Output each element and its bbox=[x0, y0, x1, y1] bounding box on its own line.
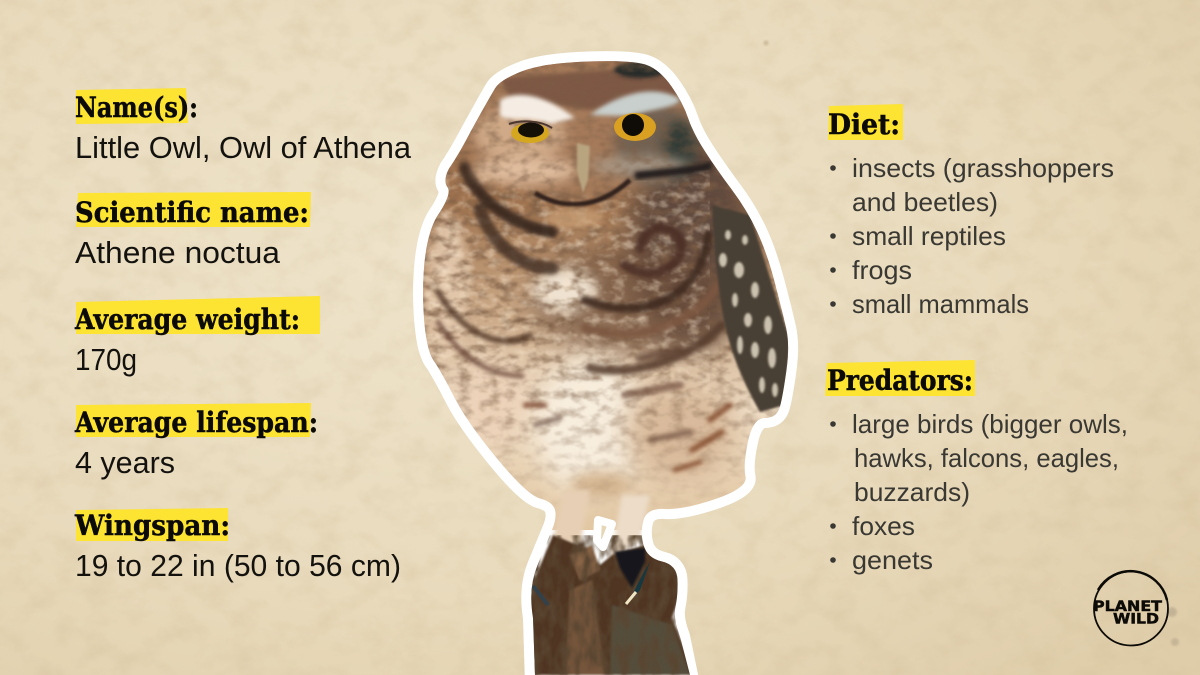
logo: Planet Wild: WILD bbox=[1113, 612, 1159, 628]
fact: scientific name: Scientific name: bbox=[75, 196, 309, 229]
fact: scientific name: Athene noctua bbox=[75, 235, 281, 270]
predators list: buzzards) bbox=[854, 477, 970, 507]
predators list: genets bbox=[852, 545, 933, 575]
folded wing bbox=[712, 205, 790, 412]
diet list: small mammals bbox=[852, 289, 1029, 319]
white sticker outline bbox=[423, 61, 788, 675]
diet list: small reptiles bbox=[852, 221, 1006, 251]
logo: Planet Wild: PLANET bbox=[1093, 599, 1162, 615]
predators list bbox=[825, 360, 1128, 575]
left eye bbox=[509, 121, 552, 143]
fact: average lifespan: 4 years bbox=[75, 445, 175, 480]
fact: wingspan: 19 to 22 in (50 to 56 cm) bbox=[75, 548, 401, 583]
gap between legs bbox=[597, 520, 612, 547]
fact: scientific name bbox=[75, 192, 311, 270]
diet list: insects (grasshoppers bbox=[852, 153, 1114, 183]
diet list: and beetles) bbox=[852, 187, 998, 217]
fact: average weight bbox=[74, 296, 320, 377]
predators list: Predators: bbox=[827, 364, 973, 397]
diet list bbox=[828, 104, 1114, 319]
legs bbox=[553, 490, 650, 560]
fact: average weight: 170g bbox=[75, 342, 137, 377]
fact: names bbox=[75, 88, 412, 165]
right eye bbox=[614, 113, 656, 141]
bill bbox=[577, 143, 590, 193]
fact: wingspan bbox=[74, 508, 401, 583]
predators list: large birds (bigger owls, bbox=[852, 409, 1128, 439]
white brows bbox=[500, 95, 575, 124]
feather texture bbox=[423, 61, 788, 502]
diet list: Diet: bbox=[828, 108, 900, 141]
owl body plumage bbox=[423, 61, 788, 530]
predators list: hawks, falcons, eagles, bbox=[854, 443, 1119, 473]
right column: diet and predators bbox=[825, 104, 1128, 575]
logo: Planet Wild bbox=[1093, 571, 1168, 646]
fact: names: Name(s): bbox=[75, 91, 198, 124]
wooden post bbox=[525, 535, 695, 675]
owl photo cut-out bbox=[410, 40, 810, 675]
fact: average weight: Average weight: bbox=[74, 303, 300, 336]
diet list: frogs bbox=[852, 255, 912, 285]
fact: average lifespan bbox=[74, 403, 318, 480]
fact: names: Little Owl, Owl of Athena bbox=[75, 130, 412, 165]
fact: average lifespan: Average lifespan: bbox=[74, 406, 318, 439]
predators list: foxes bbox=[852, 511, 915, 541]
facial ruff and bill shadow bbox=[535, 180, 630, 204]
fact: wingspan: Wingspan: bbox=[74, 509, 230, 542]
breast bands bbox=[438, 168, 730, 470]
left column: owl facts bbox=[74, 88, 412, 583]
head bbox=[463, 61, 716, 230]
